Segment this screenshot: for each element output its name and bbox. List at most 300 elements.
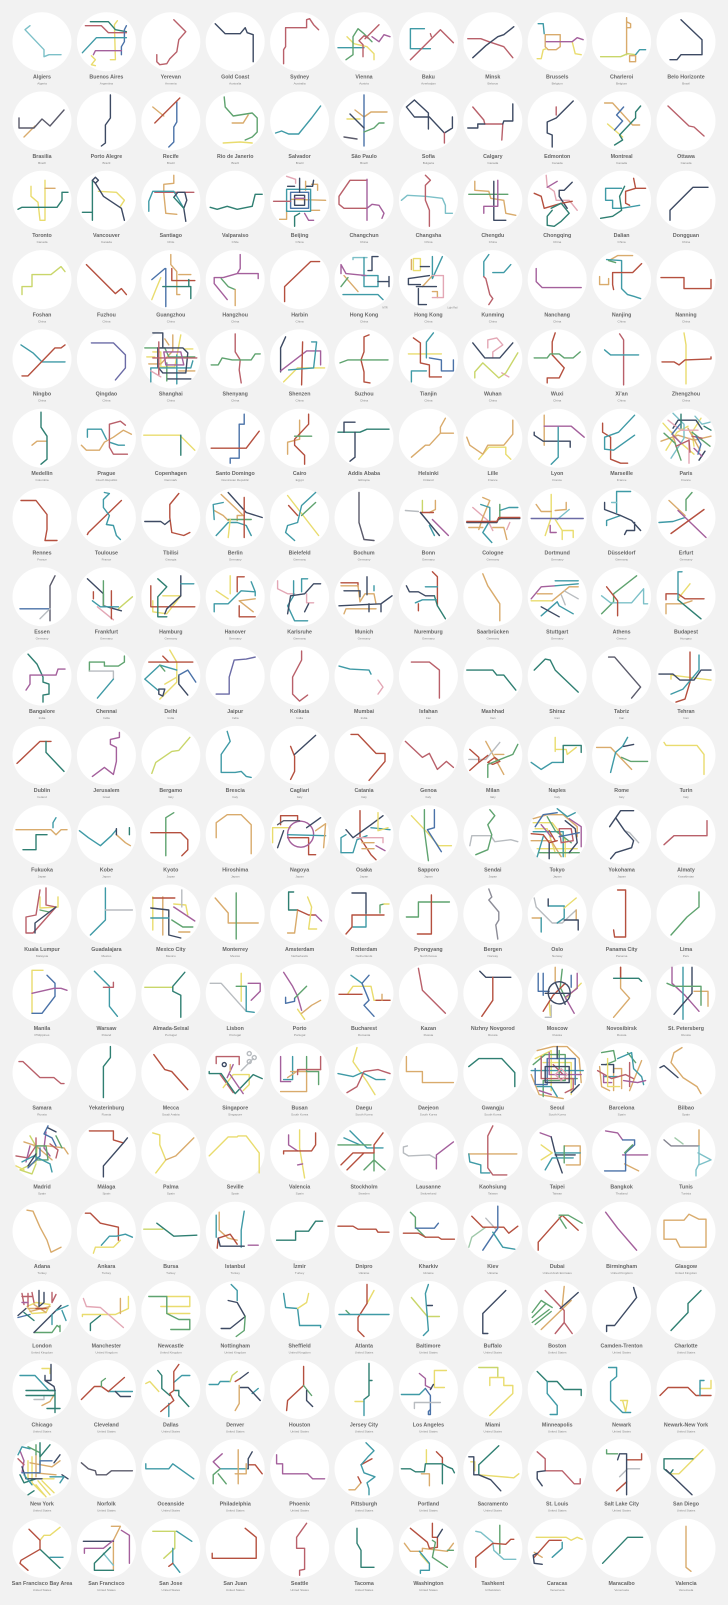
label: Portland: United States [419,1509,438,1513]
map: Lille [467,420,513,459]
label: Palma: Palma [163,1185,179,1191]
label: Vienna: Vienna [355,74,373,80]
panel: Jerusalem [77,726,136,799]
label: Istanbul: Turkey [231,1271,240,1275]
label: Busan: South Korea [291,1112,308,1116]
panel: Minsk [463,12,522,86]
map: Athens [602,576,648,616]
map: Panama City [614,890,626,937]
panel: Kuala Lumpur [12,884,72,958]
label: Sapporo [418,868,440,878]
label: Ankara: Turkey [102,1271,112,1275]
label: Moscow: Moscow [547,1026,569,1032]
label: Harbin: Harbin [291,312,308,318]
panel: Prague [77,409,136,482]
map: St. Petersberg [667,967,708,1019]
label: Bochum: Germany [358,557,371,561]
label: Cleveland: Cleveland [94,1422,119,1428]
map: Copenhagen [144,435,195,455]
label: Shiraz: Iran [555,716,560,720]
map: Pyongyang [406,895,449,934]
label: Newark [612,1422,631,1433]
label: Tokyo: Japan [553,875,562,879]
panel: Milan [463,726,522,799]
label: Palma: Spain [167,1192,175,1196]
label: Nuremburg: Germany [422,637,435,641]
panel: Newark [592,1360,651,1433]
map: Moscow [538,967,581,1017]
label: Guadalajara: Guadalajara [91,947,122,953]
label: Camden-Trenton: Camden-Trenton [601,1343,643,1349]
label: Nanjing: Nanjing [612,312,631,318]
label: Chengdu: China [489,240,497,244]
label: Chennai: India [103,716,110,720]
label: Bergamo: Italy [168,795,174,799]
label: Toronto [32,233,53,244]
map: Daejeon [406,1057,453,1083]
panel: Hiroshima [206,805,265,878]
label: Kiev: Kiev [487,1264,498,1270]
label: Charlotte: Charlotte [674,1343,698,1349]
label: San Diego: United States [677,1509,696,1513]
label: Novosibirsk [606,1026,637,1037]
panel: Salt Lake City [592,1439,651,1513]
label: Tunis: Tunis [679,1185,693,1191]
panel: Buenos Aires [77,12,136,86]
panel: Delhi [141,647,200,720]
label: Boston: Boston [548,1343,566,1349]
label: Baku [421,74,436,86]
label: Lyon [551,471,563,482]
panel: Yerevan [141,12,200,86]
label: Salvador: Brazil [296,161,304,165]
map: Istanbul [216,1211,258,1248]
map: Seoul [531,1047,583,1099]
panel: Oceanside [141,1439,200,1513]
map: San Jose [153,1531,192,1572]
label: Barcelona: Barcelona [609,1105,634,1111]
panel: Ankara [77,1202,136,1275]
map: Manchester [82,1296,128,1330]
panel: Düsseldorf [592,488,651,561]
label: Tabriz: Iran [619,716,625,720]
label: San Jose: United States [162,1588,181,1592]
panel: Edmonton [528,92,587,165]
panel: Saarbrücken [463,567,522,641]
map: Tokyo [531,809,581,859]
label: Sofia: Sofia [422,154,435,160]
map: Kunming [484,255,511,305]
label: Taipei [550,1185,565,1196]
map: Chicago [20,1364,60,1412]
label: Shenzen: China [296,399,304,403]
label: Hiroshima [222,868,248,878]
map: Buenos Aires [82,21,126,66]
label: Almada-Seixal: Almada-Seixal [153,1026,189,1032]
label: Stockholm: Stockholm [350,1185,378,1191]
label: Dalian: Dalian [614,233,630,239]
map: Wuxi [534,333,580,383]
map: Miami [479,1368,513,1416]
panel: Jersey City [334,1360,394,1433]
label: Lyon: Lyon [551,471,563,477]
map: Shenyang [211,334,260,383]
label: Brussels [546,74,568,86]
label: Bonn: Germany [422,557,435,561]
label: Dallas: Dallas [163,1422,179,1428]
label: San Jose: San Jose [159,1581,182,1587]
label: Lima: Lima [680,947,692,953]
map: Vancouver [82,177,124,220]
map: Norfolk [81,1463,132,1475]
label: Mumbai: Mumbai [354,709,375,715]
label: Singapore: Singapore [228,1112,243,1116]
label: Suzhou: Suzhou [354,392,374,398]
panel: Qingdao [77,329,136,403]
panel: Calgary [463,92,522,165]
label: Rio de Janerio [217,154,254,165]
label: Glasgow: United Kingdom [675,1271,697,1275]
map: Mexico City [151,890,195,938]
map: New York [18,1443,68,1497]
label: Seattle: United States [290,1588,309,1592]
map: London [18,1290,68,1332]
label: Santiago: Chile [167,240,175,244]
label: Birmingham: United Kingdom [611,1271,633,1275]
map: Kazan [418,968,445,1013]
map: Novosibirsk [614,967,642,1017]
label: San Francisco: San Francisco [88,1581,125,1587]
label: Xi'an: China [618,399,626,403]
label: Marseille [610,471,633,482]
map: Dubai [538,1215,582,1250]
map: Kobe [79,828,130,846]
map: Dortmund [531,494,583,540]
label: Ankara [97,1264,115,1275]
label: Shanghai: Shanghai [159,392,183,398]
panel: Nanjing [592,250,651,323]
panel: Newark-New York [656,1360,716,1433]
panel: Brescia [206,726,265,799]
panel: Philadelphia [206,1439,265,1513]
label: Saarbrücken: Saarbrücken [477,630,509,636]
label: Bangalore: Bangalore [29,709,55,715]
label: Kharkiv: Ukraine [423,1271,434,1275]
panel: Ottawa [656,92,716,165]
map: Houston [287,1366,313,1410]
label: Toulouse: Toulouse [95,550,118,556]
label: Kolkata: India [296,716,303,720]
label: Isfahan [419,709,438,720]
panel: St. Petersberg [656,964,716,1037]
map: Portland [401,1450,454,1486]
label: Nottingham: Nottingham [220,1343,250,1349]
label: Hangzhou: China [231,319,240,323]
label: Málaga: Málaga [97,1185,115,1191]
label: Medellin: Medellin [31,471,53,477]
map: Milan [469,741,518,777]
panel: Xi'an [592,329,651,403]
panel: Sofia [399,92,458,165]
panel: Caracas [528,1519,587,1592]
label: Medellin: Colombia [35,478,49,482]
map: Naples [531,737,581,769]
label: San Francisco Bay Area: United States [33,1588,52,1592]
panel: Mumbai [334,647,394,720]
label: Cleveland [94,1422,119,1433]
label: Newark: United States [612,1429,631,1433]
map: Los Angeles [401,1370,446,1414]
label: Yokohama [608,868,635,878]
label: Zhengzhou: China [682,399,690,403]
label: Frankfurt [95,630,118,641]
label: Norfolk: Norfolk [97,1502,116,1508]
label: Vienna [355,74,373,86]
label: Ningbo: Ningbo [33,392,52,398]
panel: Erfurt [656,488,716,561]
label: London: London [32,1343,52,1349]
map: Málaga [89,1131,127,1177]
label: Dublin [34,788,50,799]
panel: Dongguan [656,171,716,244]
label: Bangalore [29,709,55,720]
label: Manila: Philippines [35,1033,50,1037]
label: Sydney: Sydney [290,74,309,80]
label: San Francisco Bay Area: San Francisco Bay Area [12,1581,72,1587]
label: Moscow: Russia [552,1033,562,1037]
label: Delhi [164,709,178,720]
map: Changsha [401,175,452,226]
label: Copenhagen: Copenhagen [155,471,187,477]
label: Jersey City [350,1422,378,1433]
label: Barcelona: Spain [618,1112,626,1116]
label: Dallas: United States [162,1429,181,1433]
panel: Bilbao [656,1043,716,1116]
panel: Kunming [463,250,522,323]
label: Paris: France [681,478,691,482]
panel: Portland [399,1439,458,1513]
panel: Seville [206,1122,265,1196]
panel: San Jose [141,1519,200,1592]
label: Tabriz: Tabriz [614,709,630,715]
map: Santiago [149,175,194,221]
label: Portland [418,1502,439,1513]
map: Salvador [276,106,321,134]
panel: Chicago [12,1360,72,1433]
label: Delhi: India [167,716,174,720]
label: San Juan [223,1581,247,1592]
map: Tbilisi [145,494,190,536]
label: Norfolk: United States [97,1509,116,1513]
label: Guangzhou: China [167,319,175,323]
map: Qingdao [91,343,125,380]
label: São Paulo [351,154,378,165]
label: Oceanside [157,1502,184,1513]
label: Bochum: Bochum [353,550,375,556]
label: Munich: Munich [355,630,373,636]
label: Mexico City: Mexico [166,954,176,958]
label: Toronto: Canada [37,240,48,244]
label: Sendai: Japan [489,875,497,879]
map: Paris [661,413,711,463]
label: Nagoya: Nagoya [290,868,309,874]
map: Lyon [534,415,584,464]
map: Nanchang [536,269,581,288]
label: Dalian: China [618,240,626,244]
label: Bielefeld [289,550,311,561]
label: Montreal: Montreal [611,154,633,160]
panel: Newcastle [141,1281,200,1354]
label: Jaipur [227,709,243,720]
map: Wuhan [473,338,518,378]
label: Hong Kong MTR: Hong Kong [350,312,378,318]
map: Nanjing [600,256,642,299]
label: Sheffield [288,1343,311,1354]
label: Málaga [97,1185,115,1196]
map: Cairo [288,414,312,464]
panel: Chennai [77,647,136,720]
map: Almada-Seixal [145,972,185,1017]
panel: San Francisco Bay Area [12,1519,72,1592]
panel: Pyongyang [399,884,458,958]
label: Hong Kong Light Rail [414,312,443,323]
label: Essen: Germany [36,637,49,641]
map: Xi'an [605,334,639,385]
label: Nanchang: China [553,319,562,323]
label: Warsaw [96,1026,117,1037]
panel: Lisbon [206,964,265,1037]
map: Bergamo [152,737,190,773]
label: Lisbon: Portugal [229,1033,241,1037]
label: Denver: United States [226,1429,245,1433]
label: Isfahan: Iran [426,716,431,720]
label: Shenyang [223,392,248,403]
label: Salvador [288,154,311,165]
label: Xi'an: Xi'an [615,392,628,398]
panel: Yekaterinburg [77,1043,136,1116]
panel: Shanghai [141,329,200,403]
label: Munich [355,630,373,641]
label: Bangalore: India [39,716,46,720]
label: Changchun [349,233,379,244]
label: Rennes: France [37,557,47,561]
map: Foshan [22,267,65,295]
label: Buenos Aires: Argentina [100,82,113,86]
map: Nagoya [273,816,326,855]
label: Manila: Manila [34,1026,50,1032]
label: Turin [680,788,692,799]
label: Algiers: Algiers [33,74,51,80]
label: Helsinki: Helsinki [418,471,439,477]
label: Valencia Venezuela: Valencia [675,1581,697,1587]
panel: Baltimore [399,1281,458,1354]
label: Vancouver [93,233,120,244]
label: Novosibirsk: Novosibirsk [606,1026,637,1032]
label: Copenhagen: Denmark [165,478,178,482]
label: Fuzhou [97,312,116,323]
label: Brescia [226,788,245,799]
label: Suzhou [354,392,374,403]
panel: Bucharest [334,964,394,1037]
label: Yerevan [161,74,181,86]
label: Vancouver: Canada [101,240,112,244]
panel: Turin [656,726,716,799]
panel: Stockholm [334,1122,394,1196]
panel: São Paulo [334,92,394,165]
label: Cagliari: Cagliari [290,788,310,794]
label: Kobe [100,868,113,878]
map: Tashkent [476,1525,516,1567]
map: Essen [20,576,55,621]
map: Bielefeld [286,492,319,540]
label: San Juan: San Juan [223,1581,247,1587]
panel: Valparaiso [206,171,265,244]
panel: Houston [270,1360,329,1433]
label: Sofia: Bulgaria [423,161,434,165]
panel: Bielefeld [270,488,329,561]
map: Bonn [405,500,448,536]
label: Hangzhou [222,312,248,323]
label: Karlsruhe [287,630,312,641]
panel: Karlsruhe [270,567,329,641]
panel: Wuhan [463,329,522,403]
label: Tunis [679,1185,693,1196]
label: Catania: Catania [354,788,374,794]
map: Jerusalem [92,732,119,776]
label: Edmonton: Edmonton [544,154,570,160]
label: Charleroi: Belgium [616,82,628,86]
label: Pyongyang: North Korea [420,954,437,958]
label: Ottawa [677,154,695,165]
label: Fukuoka: Fukuoka [31,868,53,874]
label: Tacoma: Tacoma [354,1581,374,1587]
label: Boston [548,1343,567,1354]
label: Saarbrücken [477,630,509,641]
label: Marseille: Marseille [610,471,633,477]
label: Hiroshima: Hiroshima [222,868,248,874]
label: Pittsburgh: United States [355,1509,374,1513]
label: Algiers [33,74,51,86]
label: Dubai: United Arab Emirates [543,1271,572,1275]
panel: Hong Kong Light Rail [399,250,458,323]
label: Osaka: Osaka [356,868,372,874]
label: Lima [680,947,692,958]
map: Oslo [532,898,578,932]
panel: St. Louis [528,1439,587,1513]
label: Vancouver: Vancouver [93,233,120,239]
label: Sacramento: Sacramento [478,1502,509,1508]
label: Salt Lake City: Salt Lake City [604,1502,639,1508]
label: Seville: Spain [231,1192,239,1196]
map: Rennes [21,500,57,540]
panel: Lille [463,409,522,482]
panel: London [12,1281,72,1354]
label: Harbin [291,312,308,323]
label: Cologne: Germany [486,557,500,561]
label: Jaipur: India [232,716,239,720]
label: Almaty: Almaty [677,868,695,874]
label: Kolkata [290,709,309,720]
label: Prague: Prague [97,471,115,477]
label: Hamburg: Hamburg [159,630,182,636]
label: Rome [614,788,629,799]
label: Chicago: United States [33,1429,52,1433]
label: Chennai [96,709,117,720]
map: Dublin [17,741,64,771]
label: San Juan: United States [226,1588,245,1592]
label: Kazan [421,1026,436,1037]
label: Mexico City: Mexico City [156,947,186,953]
